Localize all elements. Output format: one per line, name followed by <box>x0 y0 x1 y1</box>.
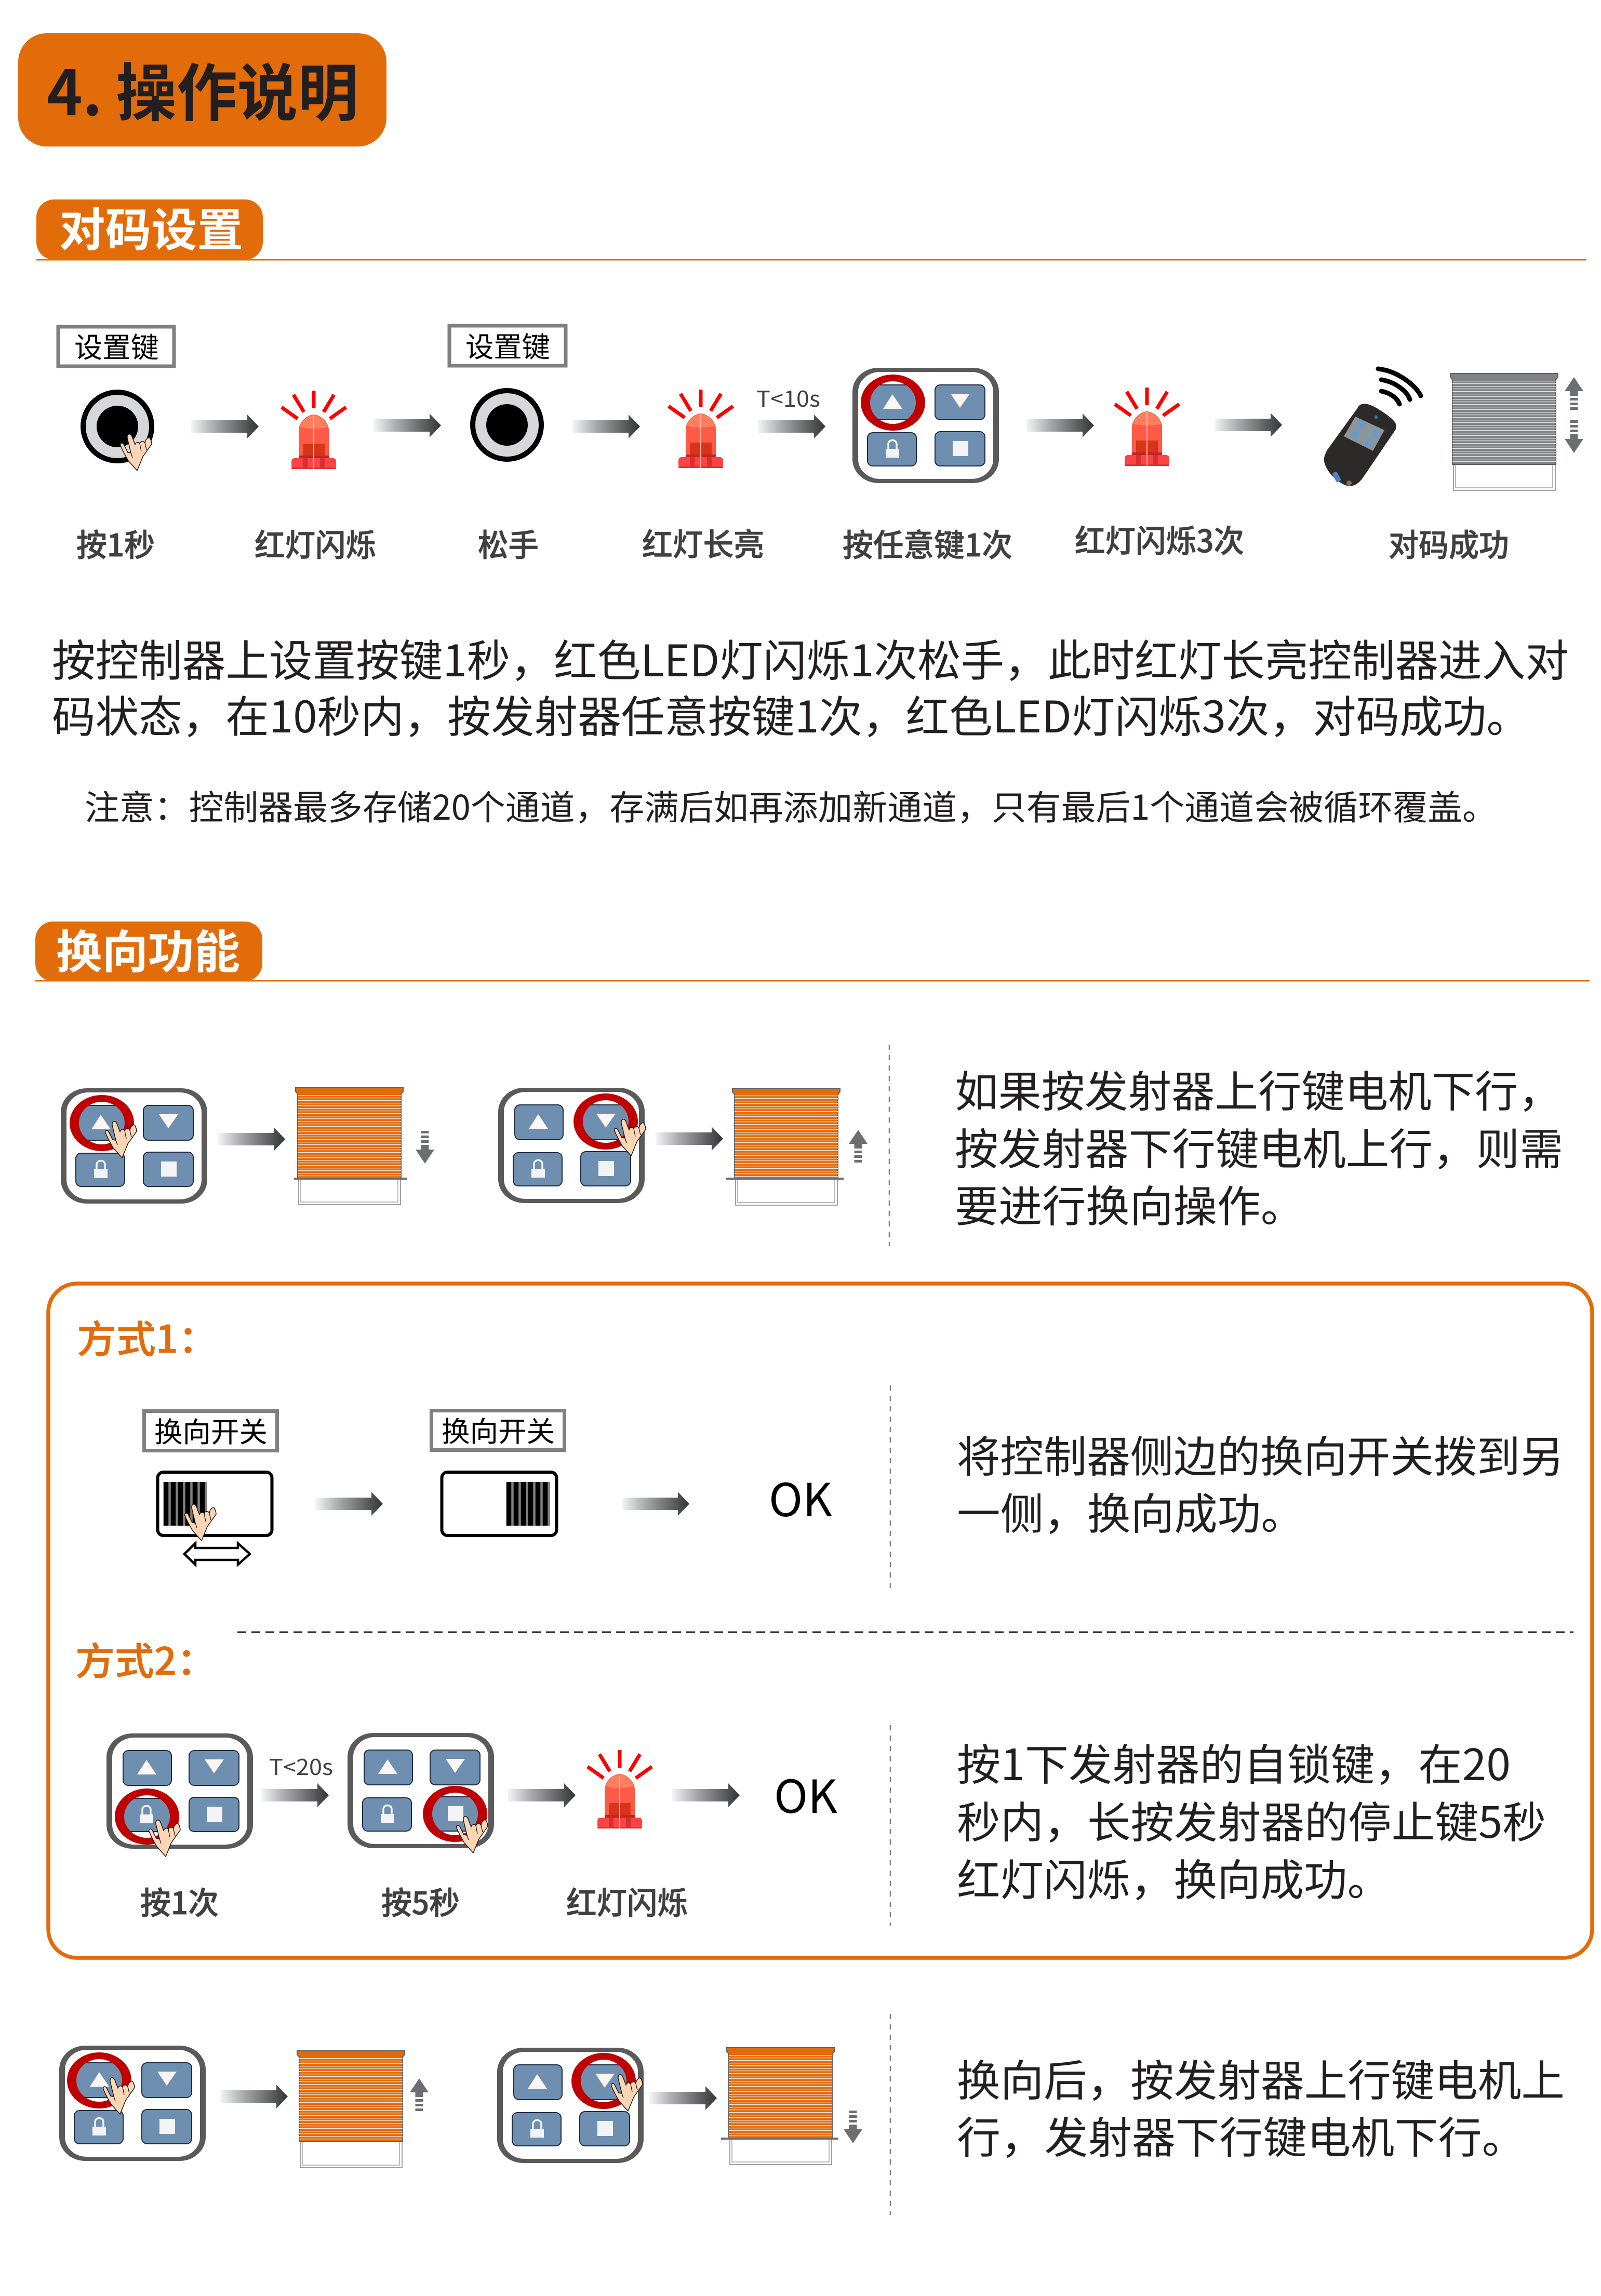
red light flashes <box>566 1750 688 1924</box>
pairing description <box>52 626 1569 745</box>
remote pressing lock key <box>106 1733 253 1924</box>
step: press any key once <box>843 368 1012 566</box>
title banner <box>18 33 386 146</box>
pairing description: 码状态，在10秒内，按发射器任意按键1次，红色LED灯闪烁3次，对码成功。 <box>52 683 1530 745</box>
switch after <box>431 1409 564 1536</box>
icon: handheld remote with signal <box>1324 369 1421 486</box>
arrow <box>191 415 259 438</box>
diagram: after reversal <box>59 2046 862 2168</box>
remote pressing stop key <box>348 1733 494 1924</box>
text: method 2 <box>957 1730 1546 1908</box>
text: method 1: 将控制器侧边的换向开关拨到另 <box>957 1422 1564 1485</box>
text: method 1 <box>957 1422 1564 1542</box>
step: red light flashes 3 times: 红灯闪烁3次 <box>1075 516 1244 562</box>
title banner: 4. 操作说明 <box>47 43 358 134</box>
text: after reversal: 行，发射器下行键电机下行。 <box>957 2103 1526 2166</box>
method 2 flow <box>106 1733 837 1924</box>
orange shutter moving up <box>297 2051 429 2168</box>
text: method 1: 一侧，换向成功。 <box>957 1479 1304 1542</box>
arrow <box>261 1783 329 1807</box>
step: press setup button 1 second: 按1秒 <box>76 520 155 566</box>
step: press any key once: 按任意键1次 <box>843 520 1012 566</box>
arrow <box>373 413 441 437</box>
step label: paired: 对码成功 <box>1389 520 1509 566</box>
step: red light flashes 3 times <box>1075 388 1244 562</box>
text: when to reverse <box>955 1057 1563 1234</box>
remote pressing up key <box>59 2046 206 2161</box>
arrow <box>649 2086 717 2110</box>
text: when to reverse: 如果按发射器上行键电机下行， <box>955 1057 1562 1119</box>
switch after: 换向开关 <box>442 1409 555 1450</box>
arrow <box>220 2085 288 2108</box>
text: after reversal <box>957 2046 1565 2166</box>
remote pressing stop key: 按5秒 <box>381 1878 460 1924</box>
time limit label: T<20s <box>269 1750 333 1782</box>
section heading: pairing setup: 对码设置 <box>59 194 243 260</box>
step: red light stays on <box>642 390 764 565</box>
section heading: pairing setup <box>36 194 1586 261</box>
switch before <box>144 1409 277 1565</box>
step: red light flashes: 红灯闪烁 <box>255 520 376 566</box>
step: press setup button 1 second: 设置键 <box>74 325 159 366</box>
switch before: 换向开关 <box>154 1409 268 1450</box>
icon: grey shutter with up and down arrows <box>1450 373 1583 490</box>
remote pressing lock key: 按1次 <box>140 1878 219 1924</box>
pairing flow diagram <box>58 324 1583 566</box>
pairing description: 按控制器上设置按键1秒，红色LED灯闪烁1次松手，此时红灯长亮控制器进入对 <box>52 626 1569 689</box>
remote pressing down key <box>498 1088 646 1203</box>
step: release button: 设置键 <box>465 324 550 365</box>
diagram: before reversal <box>61 1088 868 1205</box>
result: OK <box>774 1760 837 1826</box>
step: red light stays on: 红灯长亮 <box>642 520 764 565</box>
step: press setup button 1 second <box>58 325 174 566</box>
text: method 2: 红灯闪烁，换向成功。 <box>957 1846 1391 1908</box>
method 1 flow <box>144 1409 832 1565</box>
text: after reversal: 换向后，按发射器上行键电机上 <box>957 2046 1565 2108</box>
arrow <box>656 1127 723 1151</box>
arrow <box>508 1783 576 1807</box>
remote pressing down key <box>497 2048 644 2163</box>
text: when to reverse: 要进行换向操作。 <box>955 1172 1304 1234</box>
step: release button: 松手 <box>478 520 539 566</box>
step: red light flashes <box>255 391 376 566</box>
heading: method 1: 方式1： <box>77 1309 218 1364</box>
result: OK <box>769 1464 832 1530</box>
arrow <box>218 1127 285 1151</box>
arrow <box>758 415 825 438</box>
arrow <box>622 1492 689 1516</box>
time limit label: T<10s <box>756 382 820 413</box>
orange shutter moving up <box>726 1088 868 1205</box>
arrow <box>672 1783 740 1807</box>
panel: reversal methods <box>48 1284 1592 1958</box>
red light flashes: 红灯闪烁 <box>566 1878 688 1924</box>
arrow <box>1215 413 1282 437</box>
arrow <box>572 415 640 438</box>
orange shutter moving down <box>721 2048 862 2165</box>
text: method 2: 按1下发射器的自锁键，在20 <box>957 1730 1511 1793</box>
arrow <box>315 1492 383 1516</box>
text: when to reverse: 按发射器下行键电机上行，则需 <box>955 1115 1563 1177</box>
section heading: direction reversal: 换向功能 <box>56 916 240 982</box>
text: method 2: 秒内，长按发射器的停止键5秒 <box>957 1788 1546 1850</box>
remote pressing up key <box>61 1088 207 1204</box>
step: release button <box>449 324 566 566</box>
note on channel storage: 注意：控制器最多存储20个通道，存满后如再添加新通道，只有最后1个通道会被循环覆盖。 <box>85 780 1497 830</box>
arrow <box>1026 413 1094 437</box>
orange shutter moving down <box>294 1088 434 1205</box>
section heading: direction reversal <box>35 916 1590 982</box>
heading: method 2: 方式2： <box>75 1631 216 1686</box>
